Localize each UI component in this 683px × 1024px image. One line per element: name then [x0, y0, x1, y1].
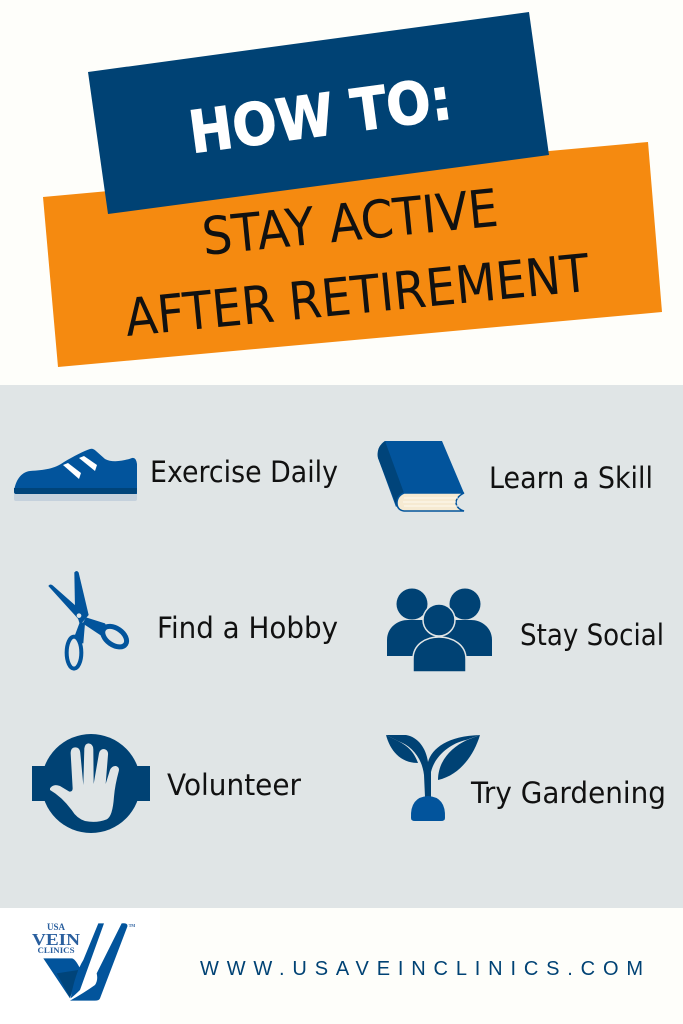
heading: how to: HOW TO:: [185, 65, 456, 167]
icon: hand: [32, 734, 150, 833]
logo text: VEIN: [32, 930, 81, 949]
logo text: TM: [129, 923, 135, 928]
panel: activities: [0, 385, 683, 908]
icon: people: [387, 588, 492, 672]
logo text: CLINICS: [38, 946, 75, 955]
logo mark: [43, 923, 127, 1001]
panel: blue banner: [88, 12, 549, 214]
icon: book: [378, 441, 464, 511]
logo: [0, 908, 160, 1024]
icon: scissors: [48, 571, 130, 669]
logo text: [32, 922, 135, 955]
label: stay social: Stay Social: [520, 618, 664, 652]
label: find a hobby: Find a Hobby: [157, 611, 338, 645]
icon: shoe: [14, 449, 137, 501]
heading: stay active: STAY ACTIVE: [199, 179, 501, 268]
label: volunteer: Volunteer: [167, 768, 301, 802]
label: learn a skill: Learn a Skill: [489, 461, 653, 495]
panel: orange banner: [43, 142, 662, 367]
label: exercise daily: Exercise Daily: [150, 455, 338, 489]
heading: after retirement: AFTER RETIREMENT: [122, 244, 592, 349]
logo text: USA: [47, 922, 65, 932]
icon: plant: [386, 735, 480, 821]
website url: WWW.USAVEINCLINICS.COM: [200, 958, 643, 980]
label: try gardening: Try Gardening: [470, 776, 666, 810]
